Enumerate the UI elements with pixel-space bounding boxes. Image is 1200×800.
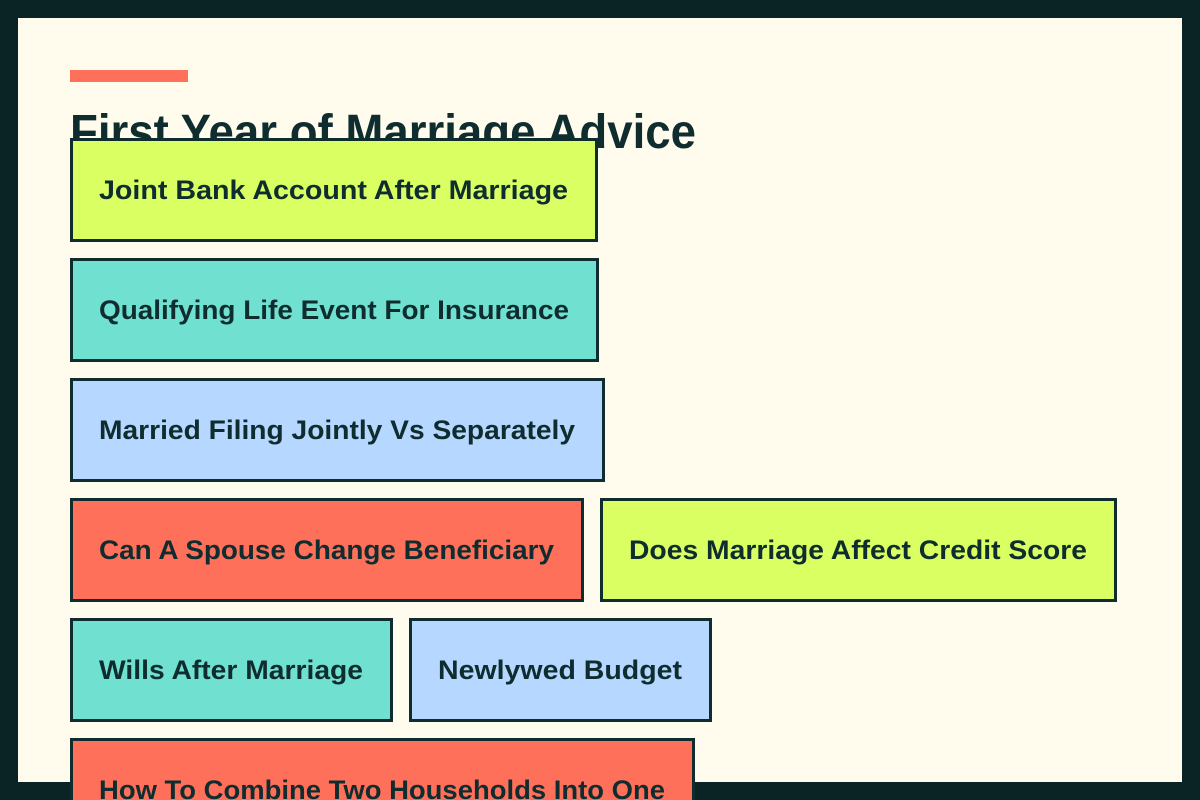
title: First Year of Marriage Advice (70, 106, 696, 159)
tag: qualifying life event (72, 260, 598, 360)
tag: newlywed budget (410, 620, 710, 720)
tag: newlywed budget: Newlywed Budget (438, 655, 682, 685)
tag: wills after marriage: Wills After Marriage (99, 655, 363, 685)
tag: married filing jointly (72, 380, 604, 480)
tag: combine two households (cut off by the bottom edge) (72, 740, 694, 800)
tag: married filing jointly: Married Filing Jointly Vs Separately (99, 415, 575, 445)
tag: spouse change beneficiary (72, 500, 582, 600)
tag: credit score: Does Marriage Affect Credit Score (629, 535, 1087, 565)
tag: qualifying life event: Qualifying Life Event For Insurance (99, 295, 569, 325)
accent bar (70, 70, 188, 82)
tag: wills after marriage (72, 620, 392, 720)
tag: joint bank account: Joint Bank Account After Marriage (99, 175, 568, 205)
tag: joint bank account (72, 140, 596, 240)
tag: credit score (602, 500, 1116, 600)
tag: spouse change beneficiary: Can A Spouse Change Beneficiary (99, 535, 554, 565)
